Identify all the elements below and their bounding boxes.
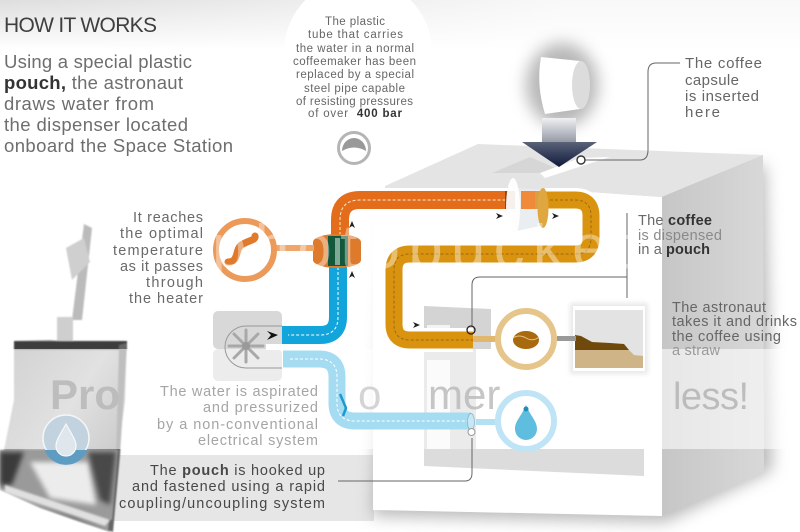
coffee bean icon <box>473 311 554 367</box>
heater caption: through <box>146 275 203 291</box>
icon: coffee capsule <box>539 57 590 114</box>
pump caption: and pressurized <box>203 400 318 416</box>
coffee callout line <box>467 213 627 334</box>
steel pipe note: steel pipe capable <box>304 83 405 95</box>
steel pipe note <box>293 16 416 120</box>
cold water pipe <box>283 359 474 430</box>
translucent overlay band <box>0 349 800 449</box>
heater caption: the optimal <box>120 226 203 242</box>
pouch callout line <box>338 428 475 481</box>
heater collar <box>313 234 361 268</box>
steel pipe note: coffeemaker has been <box>293 56 416 68</box>
coffee caption <box>638 213 722 258</box>
watermark lettering: less! <box>673 376 749 418</box>
title: HOW IT WORKS <box>4 14 157 37</box>
arrow: gauge pointer to pipe <box>346 166 364 196</box>
speech bubble background <box>284 0 432 126</box>
arrow: capsule insertion <box>522 118 597 167</box>
heater icon <box>216 221 314 279</box>
coffee machine body <box>372 144 772 522</box>
steel pipe note: the water in a normal <box>296 43 414 55</box>
astronaut caption <box>672 300 797 359</box>
capsule caption <box>685 55 762 121</box>
pump caption: The water is aspirated <box>160 384 318 400</box>
coffee caption: The coffee <box>638 213 712 229</box>
water drop icon <box>476 393 554 449</box>
steel pipe note: of over 400 bar <box>308 108 403 120</box>
capsule caption: here <box>685 104 720 121</box>
steel pipe note: of resisting pressures <box>296 96 413 108</box>
heater caption: temperature <box>113 243 203 259</box>
coffee pipe <box>394 200 591 340</box>
capsule caption: The coffee <box>685 55 762 72</box>
intro text: onboard the Space Station <box>4 135 233 156</box>
watermark lettering: mer <box>428 371 500 418</box>
pouch caption: and fastened using a rapid <box>132 479 325 495</box>
pressurised blue pipe <box>282 262 338 335</box>
pump caption <box>157 384 318 449</box>
steel pipe note: replaced by a special <box>296 69 414 81</box>
astronaut caption: a straw <box>672 343 721 359</box>
astronaut caption: takes it and drinks <box>672 314 797 330</box>
steel pipe note: The plastic <box>325 16 385 28</box>
pump caption: by a non-conventional <box>157 417 318 433</box>
watermark lettering <box>50 371 749 418</box>
pump icon <box>213 311 284 381</box>
intro text: Using a special plastic <box>4 51 192 72</box>
transparent capsule chamber <box>505 178 548 238</box>
intro text: draws water from <box>4 93 154 114</box>
pouch caption: coupling/uncoupling system <box>119 496 325 512</box>
steel pipe note: tube that carries <box>308 29 403 41</box>
intro text: pouch, the astronaut <box>4 72 183 93</box>
icon: water drop badge on pouch <box>43 415 89 465</box>
coffee caption: in a pouch <box>638 242 710 258</box>
flow direction arrows <box>340 213 559 416</box>
pump caption: electrical system <box>198 433 318 449</box>
intro text <box>4 51 233 156</box>
pouch caption <box>119 463 325 512</box>
capsule caption: is inserted <box>685 88 759 105</box>
capsule caption: capsule <box>685 72 739 89</box>
watermark logo: photobucket <box>212 213 632 282</box>
pouch caption: The pouch is hooked up <box>150 463 325 479</box>
hot water pipe <box>340 200 516 240</box>
astronaut caption: The astronaut <box>672 300 766 316</box>
heater caption: as it passes <box>120 259 203 275</box>
coffee caption: is dispensed <box>638 228 722 244</box>
astronaut caption: the coffee using <box>672 329 781 345</box>
bottom grey band behind pouch caption <box>112 455 374 521</box>
capsule callout line <box>577 63 680 164</box>
watermark lettering: o <box>358 371 381 418</box>
intro text: the dispenser located <box>4 114 188 135</box>
heater caption: the heater <box>129 291 203 307</box>
capsule shadow <box>526 43 598 127</box>
heater caption <box>113 210 203 307</box>
heater caption: It reaches <box>133 210 203 226</box>
coffee pouch inset <box>557 303 648 374</box>
icon: pressure gauge <box>338 132 370 164</box>
pouch: silver bag with tube <box>0 224 127 532</box>
watermark lettering: Pro <box>50 371 120 418</box>
